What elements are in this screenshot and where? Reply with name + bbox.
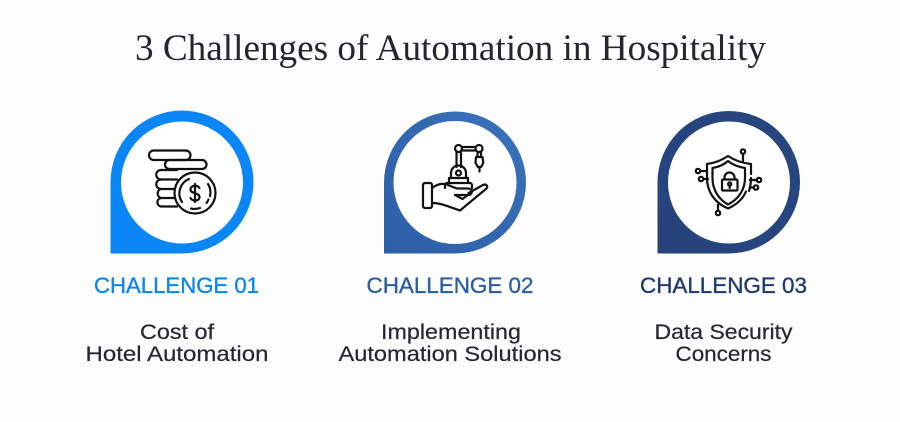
description: implementing automation solutions: Implementing [381, 320, 521, 344]
description: data security concerns: Concerns [676, 342, 772, 366]
icon: robot arm on hand [423, 145, 487, 210]
description: data security concerns: Data Security [654, 320, 793, 344]
description: implementing automation solutions: Automation Solutions [338, 342, 562, 366]
icon: shield with padlock [696, 149, 761, 215]
panel: challenge 03 [640, 111, 807, 366]
icon: coins with dollar [149, 150, 216, 214]
label: challenge 02: CHALLENGE 02 [366, 273, 534, 298]
pin badge 01 [110, 110, 253, 254]
title: 3 Challenges of Automation in Hospitality [135, 28, 766, 69]
panel: challenge 02 [338, 111, 562, 366]
description: data security concerns [654, 320, 793, 366]
panel: challenge 01 [86, 110, 268, 366]
description: implementing automation solutions [338, 320, 562, 366]
description: cost of hotel automation: Cost of [140, 320, 214, 344]
label: challenge 01: CHALLENGE 01 [94, 273, 259, 298]
pin badge 02 [384, 111, 526, 253]
description: cost of hotel automation [86, 320, 268, 366]
description: cost of hotel automation: Hotel Automation [86, 342, 268, 366]
label: challenge 03: CHALLENGE 03 [640, 273, 807, 298]
pin badge 03 [657, 111, 800, 253]
